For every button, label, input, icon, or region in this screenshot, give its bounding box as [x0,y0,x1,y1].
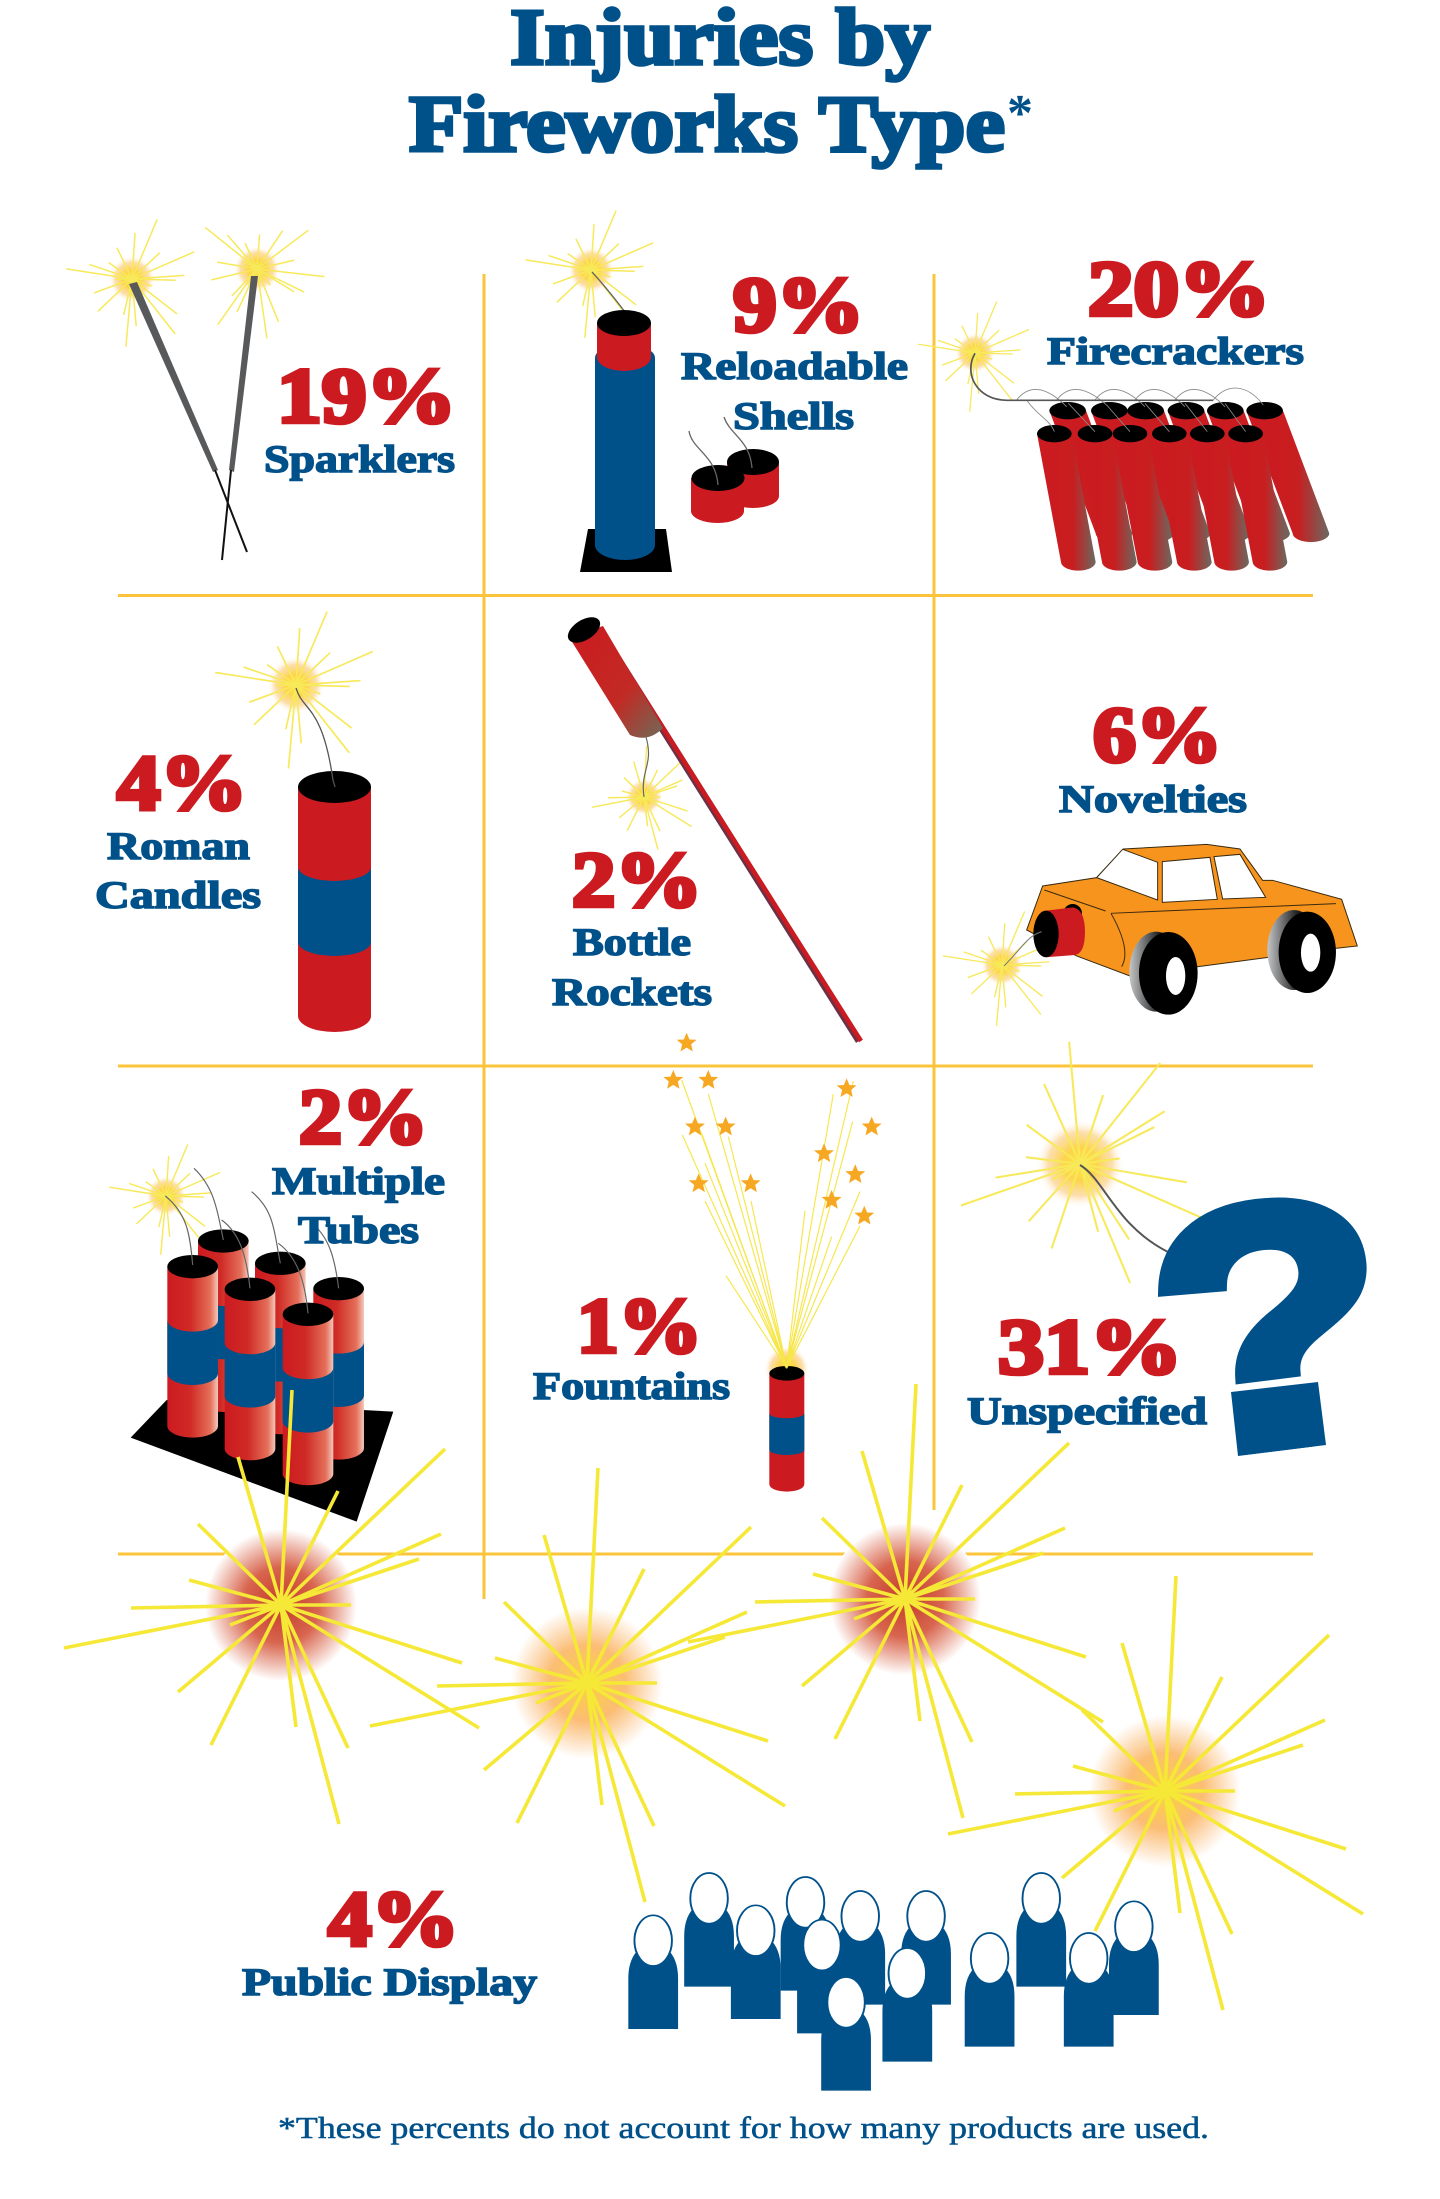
stat: public display: Public Display [242,1961,538,2004]
stat: public display [242,1875,538,2004]
stat: sparklers: Sparklers [264,438,455,481]
stat: roman candles [95,739,261,917]
icon: question mark: ? [1131,1121,1410,1529]
icon: car with firecracker [927,844,1357,1039]
stat: sparklers: 19% [277,352,456,439]
stat: firecrackers [1047,245,1304,373]
stat: fountains [533,1282,730,1408]
title: Fireworks Type [409,81,1005,169]
icon: burst with fuse [940,1027,1209,1305]
large firework bursts [64,1384,1363,2010]
stat: firecrackers: 20% [1088,245,1270,332]
stat: fountains: Fountains [533,1365,730,1408]
icon: multiple tubes [94,1124,393,1522]
icon: reloadable shells [507,187,779,572]
stat: reloadable shells: Reloadable [681,345,908,388]
stat: bottle rockets: Rockets [552,971,712,1014]
stat: roman candles: Roman [107,825,250,868]
title [409,0,1033,169]
burst 4 [948,1576,1363,2010]
burst 2 [370,1468,785,1902]
stat: public display: 4% [328,1875,459,1962]
stat: unspecified: 31% [998,1303,1182,1390]
stat: bottle rockets: Bottle [573,921,691,964]
stat: roman candles: 4% [117,739,247,826]
stat: multiple tubes: Tubes [298,1209,419,1252]
stat: firecrackers: Firecrackers [1047,330,1304,373]
stat: sparklers [264,352,456,481]
stat: novelties [1059,691,1247,821]
stat: reloadable shells [681,261,908,438]
footnote: *These percents do not account for how many products are used. [278,2110,1209,2145]
burst 3 [688,1384,1103,1818]
stat: multiple tubes: Multiple [272,1160,445,1203]
icon: firecrackers [903,281,1329,571]
stat: unspecified: Unspecified [967,1390,1207,1433]
burst 1 [64,1390,479,1824]
stat: novelties: Novelties [1059,778,1247,821]
icon: bottle rocket [563,612,861,1041]
stat: multiple tubes [272,1073,445,1252]
stat: reloadable shells: Shells [733,395,854,438]
stat: unspecified [967,1303,1207,1433]
icon: crowd of people [628,1873,1159,2091]
icon: roman candle [193,583,392,1032]
stat: bottle rockets [552,836,712,1014]
icon: fountain with stars [663,1033,882,1492]
stat: roman candles: Candles [95,874,261,917]
stat: novelties: 6% [1093,691,1222,778]
stat: fountains: 1% [577,1282,702,1369]
title: * [1007,85,1033,142]
stat: multiple tubes: 2% [299,1073,428,1160]
stat: reloadable shells: 9% [733,261,864,348]
icon: sparklers [48,178,345,560]
stat: bottle rockets: 2% [572,836,702,923]
